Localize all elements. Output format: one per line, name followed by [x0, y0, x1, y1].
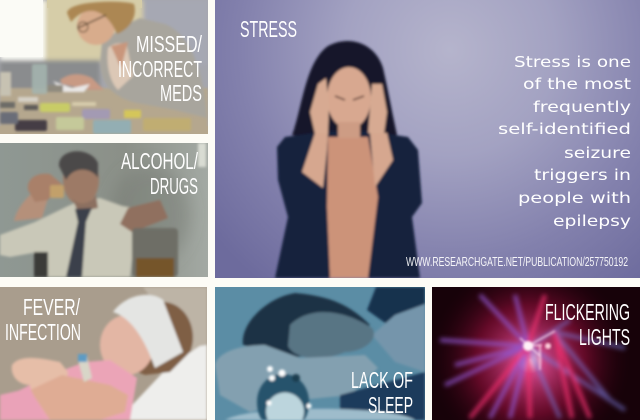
panel: stress: [215, 0, 640, 278]
text block: stress description: people with: [518, 189, 631, 207]
heading: fever/infection: FEVER/: [23, 294, 80, 320]
panel: missed or incorrect meds: [0, 0, 208, 134]
text block: stress description: epilepsy: [553, 212, 631, 230]
heading: stress: STRESS: [240, 16, 297, 42]
text block: stress description: seizure: [564, 144, 631, 162]
panel: alcohol and drugs: [0, 143, 208, 277]
photo: woman holding her temples: [215, 0, 640, 278]
heading: missed/incorrect meds: MISSED/: [136, 31, 202, 57]
heading: fever/infection: INFECTION: [5, 319, 81, 345]
text block: stress description: triggers in: [534, 166, 631, 184]
icon: alarm clock: [257, 366, 312, 420]
heading: missed/incorrect meds: INCORRECT: [118, 56, 202, 82]
heading: alcohol/drugs: ALCOHOL/: [121, 148, 198, 174]
heading: lack of sleep: SLEEP: [368, 392, 413, 418]
text block: stress description: Stress is one: [514, 53, 631, 71]
heading: alcohol/drugs: DRUGS: [150, 173, 198, 199]
heading: fever/infection: [6, 298, 80, 340]
photo: woman reading pill packet: [0, 0, 208, 134]
panel: flickering lights: [432, 287, 640, 420]
photo: stage light beams: [432, 287, 640, 420]
heading: missed/incorrect meds: [119, 35, 202, 101]
panel: fever and infection: [0, 287, 207, 420]
heading: flickering lights: [546, 304, 630, 345]
text block: stress description: [498, 53, 631, 230]
text block: stress description: of the most: [523, 75, 631, 93]
heading: lack of sleep: [352, 372, 412, 413]
photo: sleepless man with alarm clock: [215, 287, 425, 420]
photo: man drinking: [0, 143, 208, 277]
text block: stress description: self-identified: [498, 120, 631, 138]
panel: lack of sleep: [215, 287, 425, 420]
text block: stress description: frequently: [533, 98, 631, 116]
photo: child with cold compress: [0, 287, 207, 420]
heading: lack of sleep: LACK OF: [351, 367, 413, 393]
heading: missed/incorrect meds: MEDS: [160, 80, 202, 106]
heading: alcohol/drugs: [121, 152, 198, 194]
